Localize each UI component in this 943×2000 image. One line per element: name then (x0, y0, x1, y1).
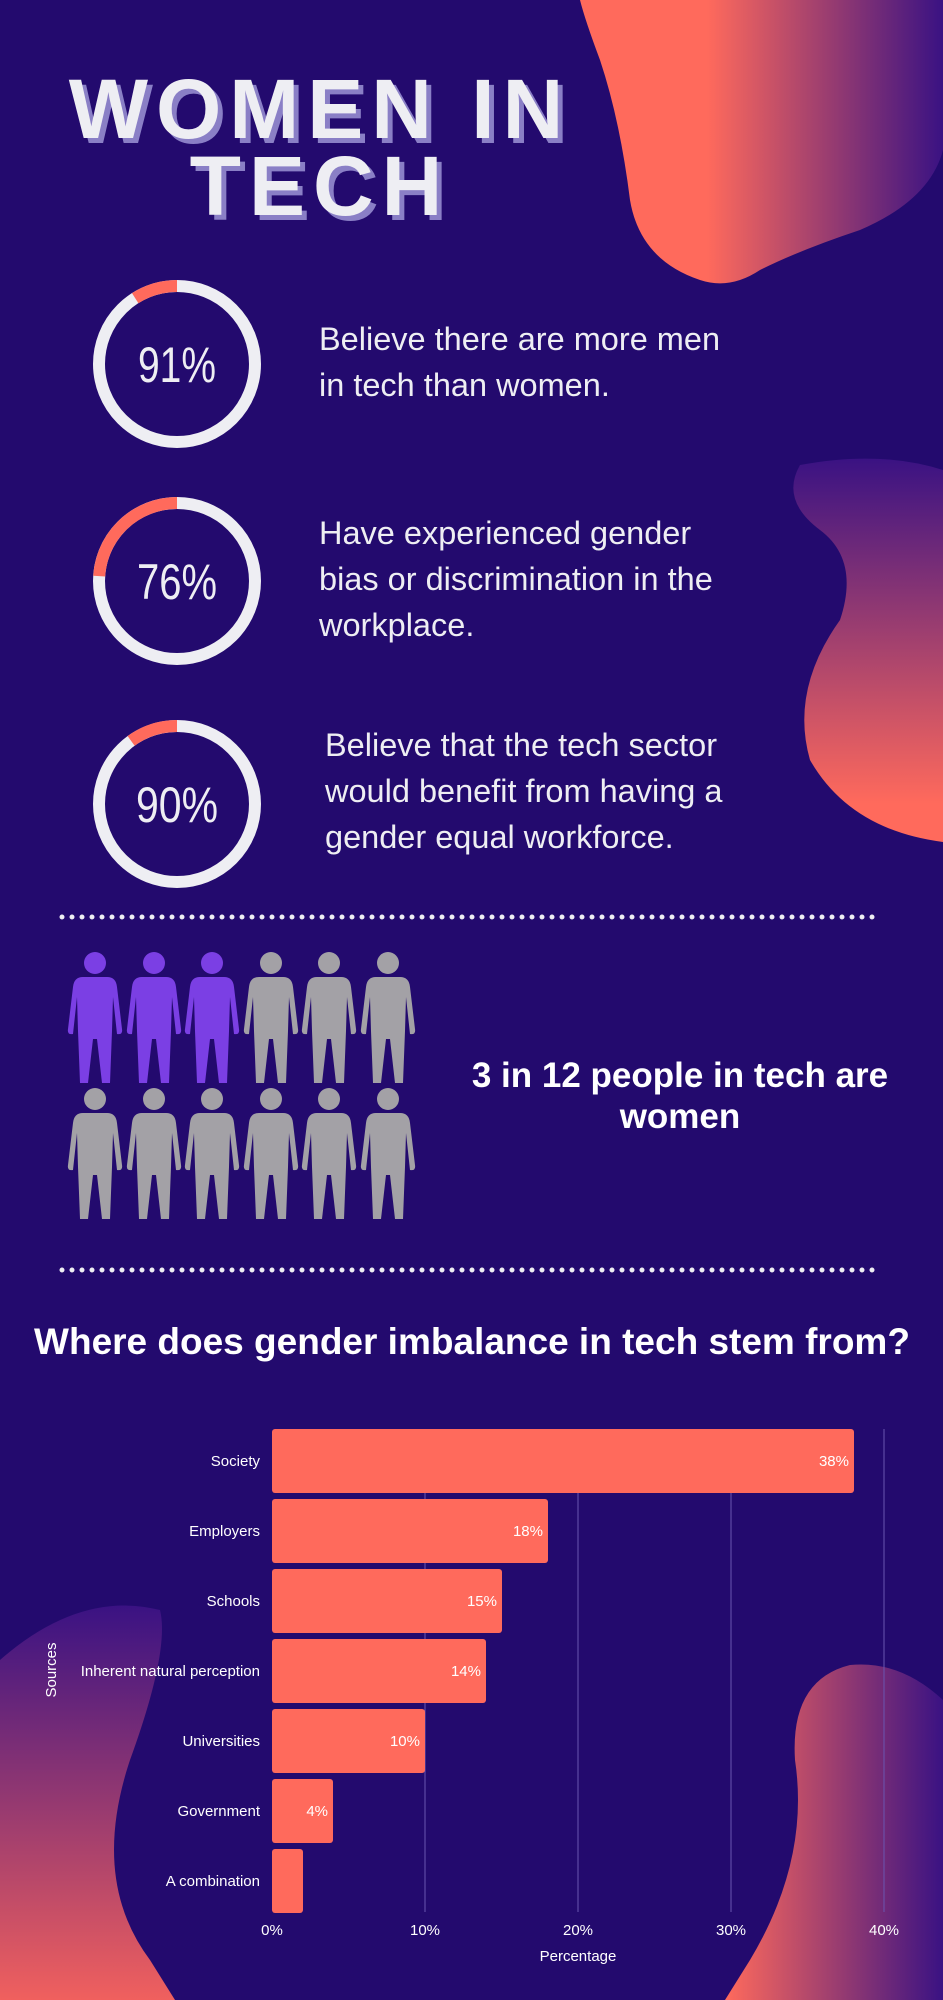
title: WOMEN IN (69, 62, 571, 156)
stat 2 text (318, 515, 713, 643)
stat 2 text: workplace. (318, 607, 474, 643)
title (69, 62, 576, 238)
bar chart: 15% (467, 1593, 497, 1610)
bar chart: Schools (207, 1593, 260, 1610)
bar chart: 14% (451, 1663, 481, 1680)
bar chart: Employers (189, 1523, 260, 1540)
stat 1: donut 91%: 91% (138, 337, 216, 393)
stat 3 text (324, 727, 723, 855)
chart heading: Where does gender imbalance in tech stem from? (34, 1321, 910, 1362)
stat 2 text: bias or discrimination in the (319, 561, 713, 597)
blob: bottom left (0, 1606, 175, 2000)
bar chart: Inherent natural perception (81, 1663, 260, 1680)
bar chart: 30% (716, 1922, 746, 1939)
bar chart (43, 1429, 899, 1965)
pictogram caption: women (619, 1097, 740, 1136)
bar chart: 4% (306, 1803, 328, 1820)
stat 1: donut 91% (99, 286, 255, 442)
stat 2 text: Have experienced gender (319, 515, 691, 551)
bar chart: 10% (410, 1922, 440, 1939)
blob: top right (580, 0, 943, 283)
bar chart: 20% (563, 1922, 593, 1939)
pictogram: 3 in 12 people (68, 952, 415, 1219)
bar chart: 0% (261, 1922, 283, 1939)
bar chart: Sources (43, 1642, 60, 1698)
stat 3 text: Believe that the tech sector (325, 727, 717, 763)
stat 2: donut 76% (99, 503, 255, 659)
stat 1 text: in tech than women. (319, 367, 610, 403)
blob: bottom right (725, 1664, 943, 2000)
title: TECH (190, 139, 450, 233)
bar chart: A combination (166, 1873, 260, 1890)
stat 3 text: would benefit from having a (324, 773, 723, 809)
blob: middle right (793, 459, 943, 842)
pictogram caption (472, 1056, 888, 1136)
pictogram caption: 3 in 12 people in tech are (472, 1056, 888, 1095)
bar chart: Universities (182, 1733, 260, 1750)
title: WOMEN IN (74, 67, 576, 161)
stat 3: donut 90% (99, 726, 255, 882)
stat 3 text: gender equal workforce. (325, 819, 674, 855)
bar chart: Government (177, 1803, 261, 1820)
bar chart: 40% (869, 1922, 899, 1939)
title: TECH (195, 144, 455, 238)
stat 1 text: Believe there are more men (319, 321, 720, 357)
stat 2: donut 76%: 76% (137, 554, 217, 610)
bar chart: Percentage (540, 1948, 616, 1965)
stat 3: donut 90%: 90% (136, 777, 218, 833)
bar chart: Society (211, 1453, 260, 1470)
stat 1 text (319, 321, 720, 403)
bar chart: 10% (390, 1733, 420, 1750)
bar chart: 18% (513, 1523, 543, 1540)
bar chart: 38% (819, 1453, 849, 1470)
